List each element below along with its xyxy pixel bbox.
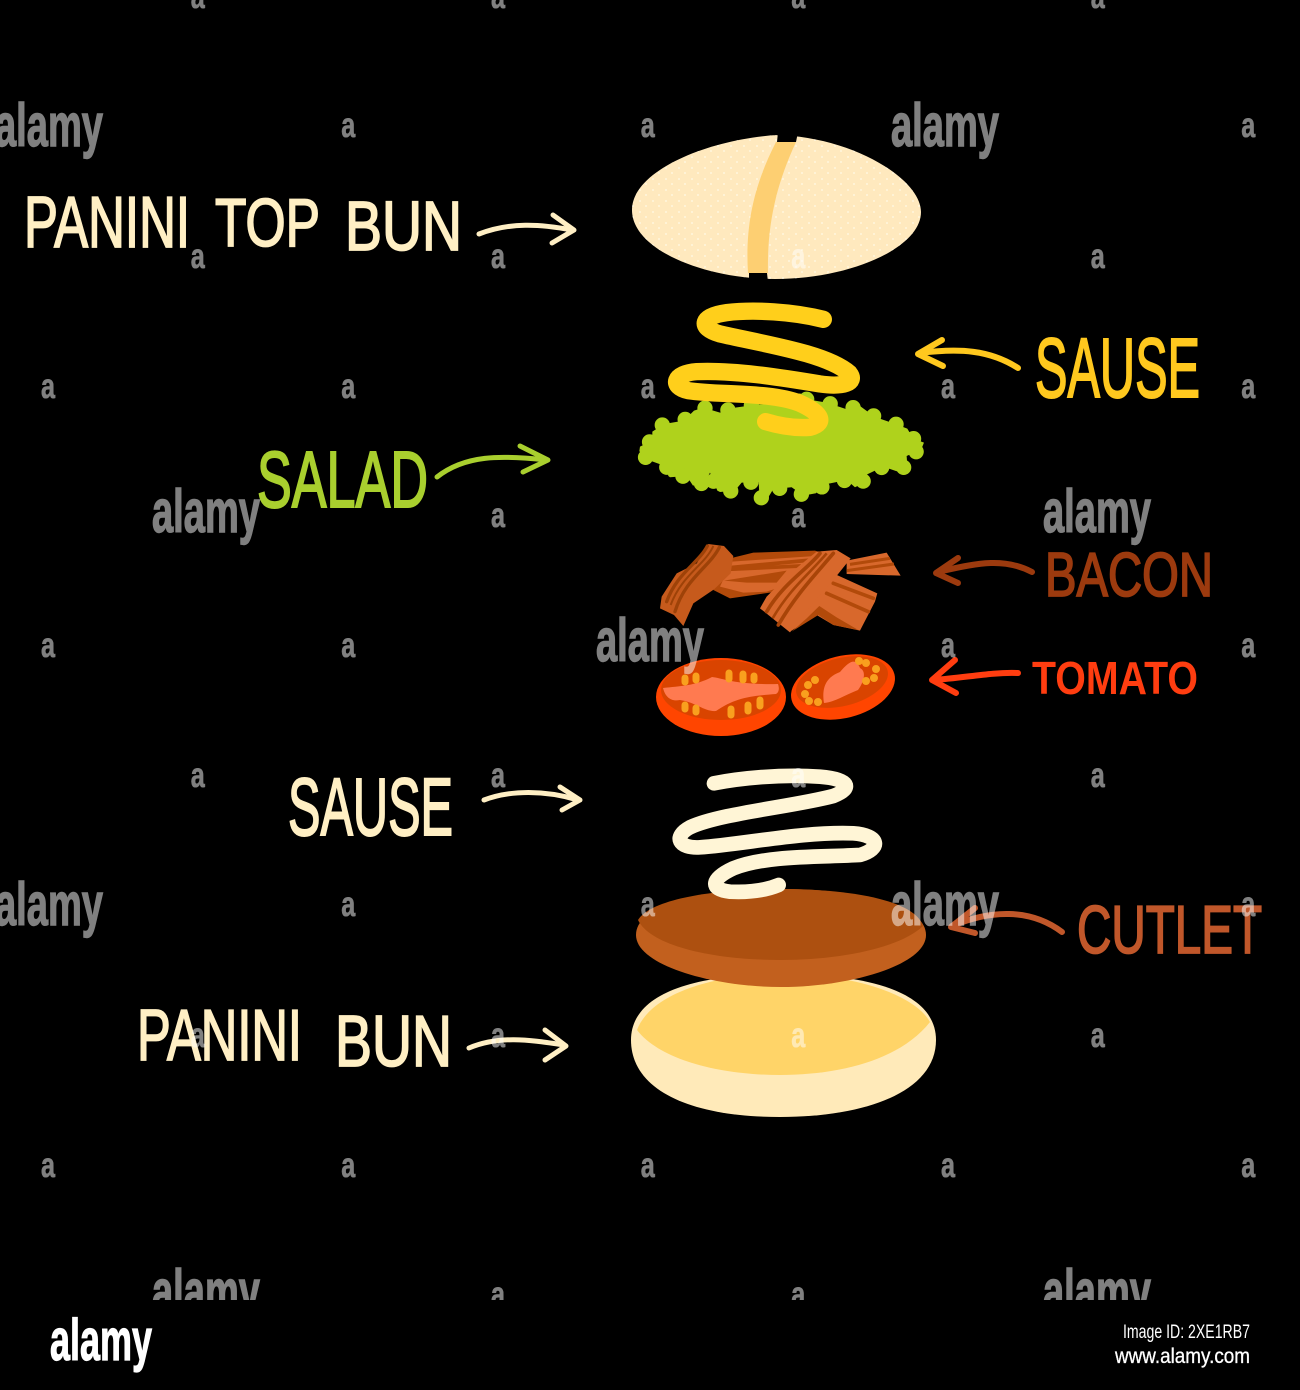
watermark pattern: alamy (1043, 1258, 1151, 1325)
icon: salad leaf (639, 399, 924, 499)
watermark pattern: alamy (0, 92, 103, 159)
watermark pattern: alamy (596, 607, 704, 674)
watermark pattern: aaaa (191, 1016, 1106, 1055)
footer website: www.alamy.com (1114, 1345, 1250, 1368)
watermark pattern: aaaaa (41, 367, 1256, 406)
icon: tomato slices (656, 644, 902, 736)
label: panini bun (137, 996, 452, 1082)
arrow: cutlet (951, 908, 1062, 933)
icon: mustard sauce drizzle (677, 311, 851, 428)
watermark pattern: aaa (341, 885, 1256, 924)
watermark pattern: aaaaa (41, 1146, 1256, 1185)
label: panini top bun: TOP (215, 185, 320, 261)
label: panini top bun: BUN (345, 187, 462, 265)
watermark pattern: aa (491, 1275, 806, 1314)
icon: panini top bun (632, 132, 921, 282)
footer image id: Image ID: 2XE1RB7 (1123, 1322, 1250, 1343)
watermark pattern: alamy (152, 1258, 260, 1325)
arrow: mayonnaise sause (484, 787, 580, 810)
label: bacon: BACON (1045, 541, 1213, 610)
arrow: tomato (932, 660, 1018, 693)
label: panini top bun (24, 183, 462, 265)
watermark pattern: alamy (1043, 478, 1151, 545)
label: panini bun: PANINI (137, 996, 302, 1076)
watermark pattern: alamy (0, 871, 103, 938)
watermark pattern: aaaa (191, 756, 1106, 795)
icon: cutlet (636, 889, 926, 987)
watermark pattern: alamy (152, 478, 260, 545)
icon: bacon strips (660, 544, 901, 632)
icon: bottom panini bun (631, 974, 936, 1117)
label: tomato: TOMATO (1032, 652, 1198, 704)
watermark pattern: aa (491, 496, 806, 535)
arrow: panini bun (469, 1030, 566, 1060)
icon: mayonnaise drizzle (680, 776, 875, 892)
label: panini top bun: PANINI (24, 183, 190, 263)
label: salad: SALAD (257, 435, 428, 524)
arrow: bacon (936, 558, 1032, 583)
watermark pattern: aaaa (191, 237, 1106, 276)
watermark pattern: alamy (891, 871, 999, 938)
arrow: salad (437, 446, 548, 477)
watermark pattern: alamy (891, 92, 999, 159)
label: panini bun: BUN (335, 1002, 452, 1082)
watermark pattern: aaa (341, 106, 1256, 145)
label: mayonnaise sause: SAUSE (288, 762, 453, 853)
arrow: mustard sause (918, 340, 1018, 368)
arrow: top bun (479, 215, 574, 243)
watermark pattern: aaaa (41, 626, 1256, 665)
footer stock logo: alamy (50, 1308, 152, 1373)
